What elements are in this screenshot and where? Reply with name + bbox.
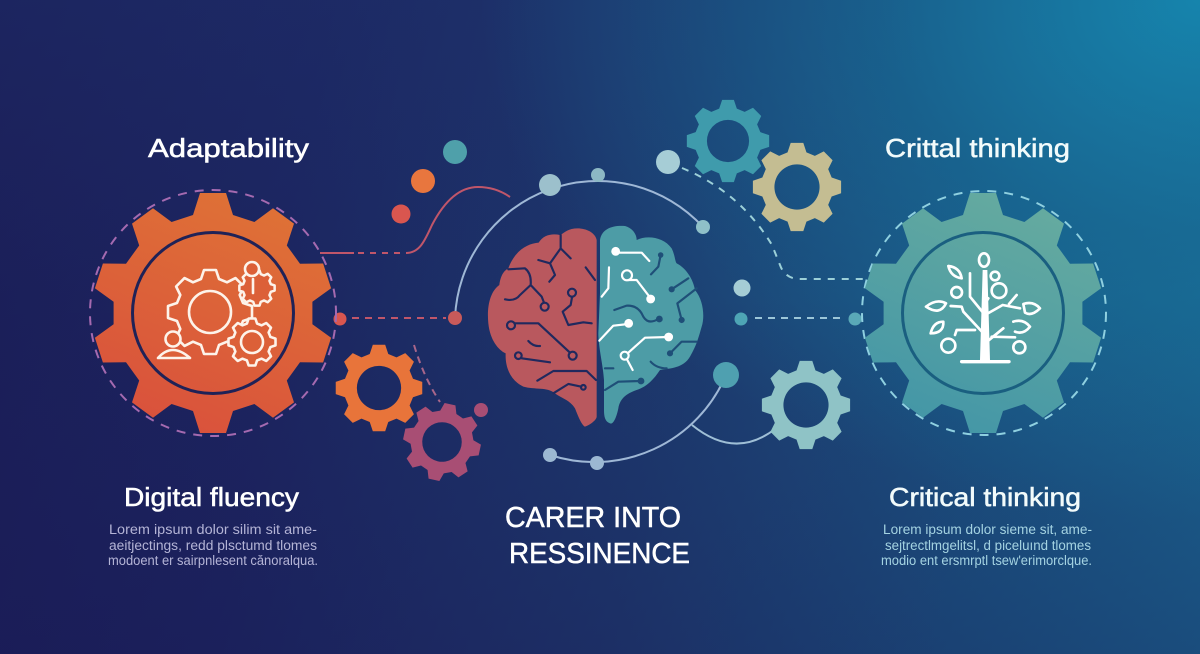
decorative dots: upper left xyxy=(392,140,467,224)
brain xyxy=(488,226,703,427)
large teal gear xyxy=(865,193,1101,433)
body text right: modio ent ersmrptl tsew'erimorclque. xyxy=(881,553,1092,568)
inner ring right xyxy=(902,232,1064,394)
center title xyxy=(505,502,690,570)
icon: gears and person xyxy=(158,262,276,366)
center title: CARER INTO xyxy=(505,502,681,534)
panel: right gear Critical thinking xyxy=(862,191,1106,435)
body text left: aeitjectings, redd plsctumd tlomes xyxy=(109,538,317,553)
small teal gear top xyxy=(687,100,769,182)
dashed link to purple gear xyxy=(414,345,440,402)
icon: circuit tree xyxy=(926,253,1040,362)
large orange gear xyxy=(95,193,331,433)
dashed orbit left xyxy=(90,190,336,436)
circuit traces right dark xyxy=(605,253,697,390)
body text left: Lorem ipsum dolor silim sit ame- xyxy=(109,522,317,537)
small tan gear top xyxy=(753,143,841,231)
right connector: dashed row xyxy=(734,280,862,326)
small purple gear xyxy=(396,396,488,488)
center title: RESSINENCE xyxy=(509,538,690,570)
inner ring left xyxy=(132,232,294,394)
left connector: pink dashed curve xyxy=(320,187,510,253)
heading: Critical thinking: Critical thinking xyxy=(889,482,1081,512)
dashed orbit right xyxy=(862,191,1106,435)
body text left: modoent er sairpnlesent cănoralqua. xyxy=(108,553,318,568)
small pale gear lower right xyxy=(762,361,850,449)
right connector: dashed curve xyxy=(656,150,868,279)
heading: Crittal thinking: Crittal thinking xyxy=(885,133,1070,163)
body text right: sejtrectlmgelitsl, d piceluınd tlomes xyxy=(885,538,1091,553)
left connector: dashed row to brain xyxy=(334,312,446,326)
circular orbit around brain xyxy=(448,168,775,470)
body text left xyxy=(108,522,318,568)
heading: Adaptability: Adaptability xyxy=(148,133,309,163)
brain left hemisphere xyxy=(488,228,597,427)
circuit traces left xyxy=(505,235,596,393)
circuit traces right white xyxy=(599,248,672,370)
heading: Digital fluency: Digital fluency xyxy=(124,482,299,512)
body text right: Lorem ipsum dolor sieme sit, ame- xyxy=(883,522,1092,537)
brain right hemisphere xyxy=(598,226,703,424)
body text right xyxy=(881,522,1092,568)
small orange gear xyxy=(336,345,422,431)
panel: left gear Adaptability xyxy=(90,190,336,436)
